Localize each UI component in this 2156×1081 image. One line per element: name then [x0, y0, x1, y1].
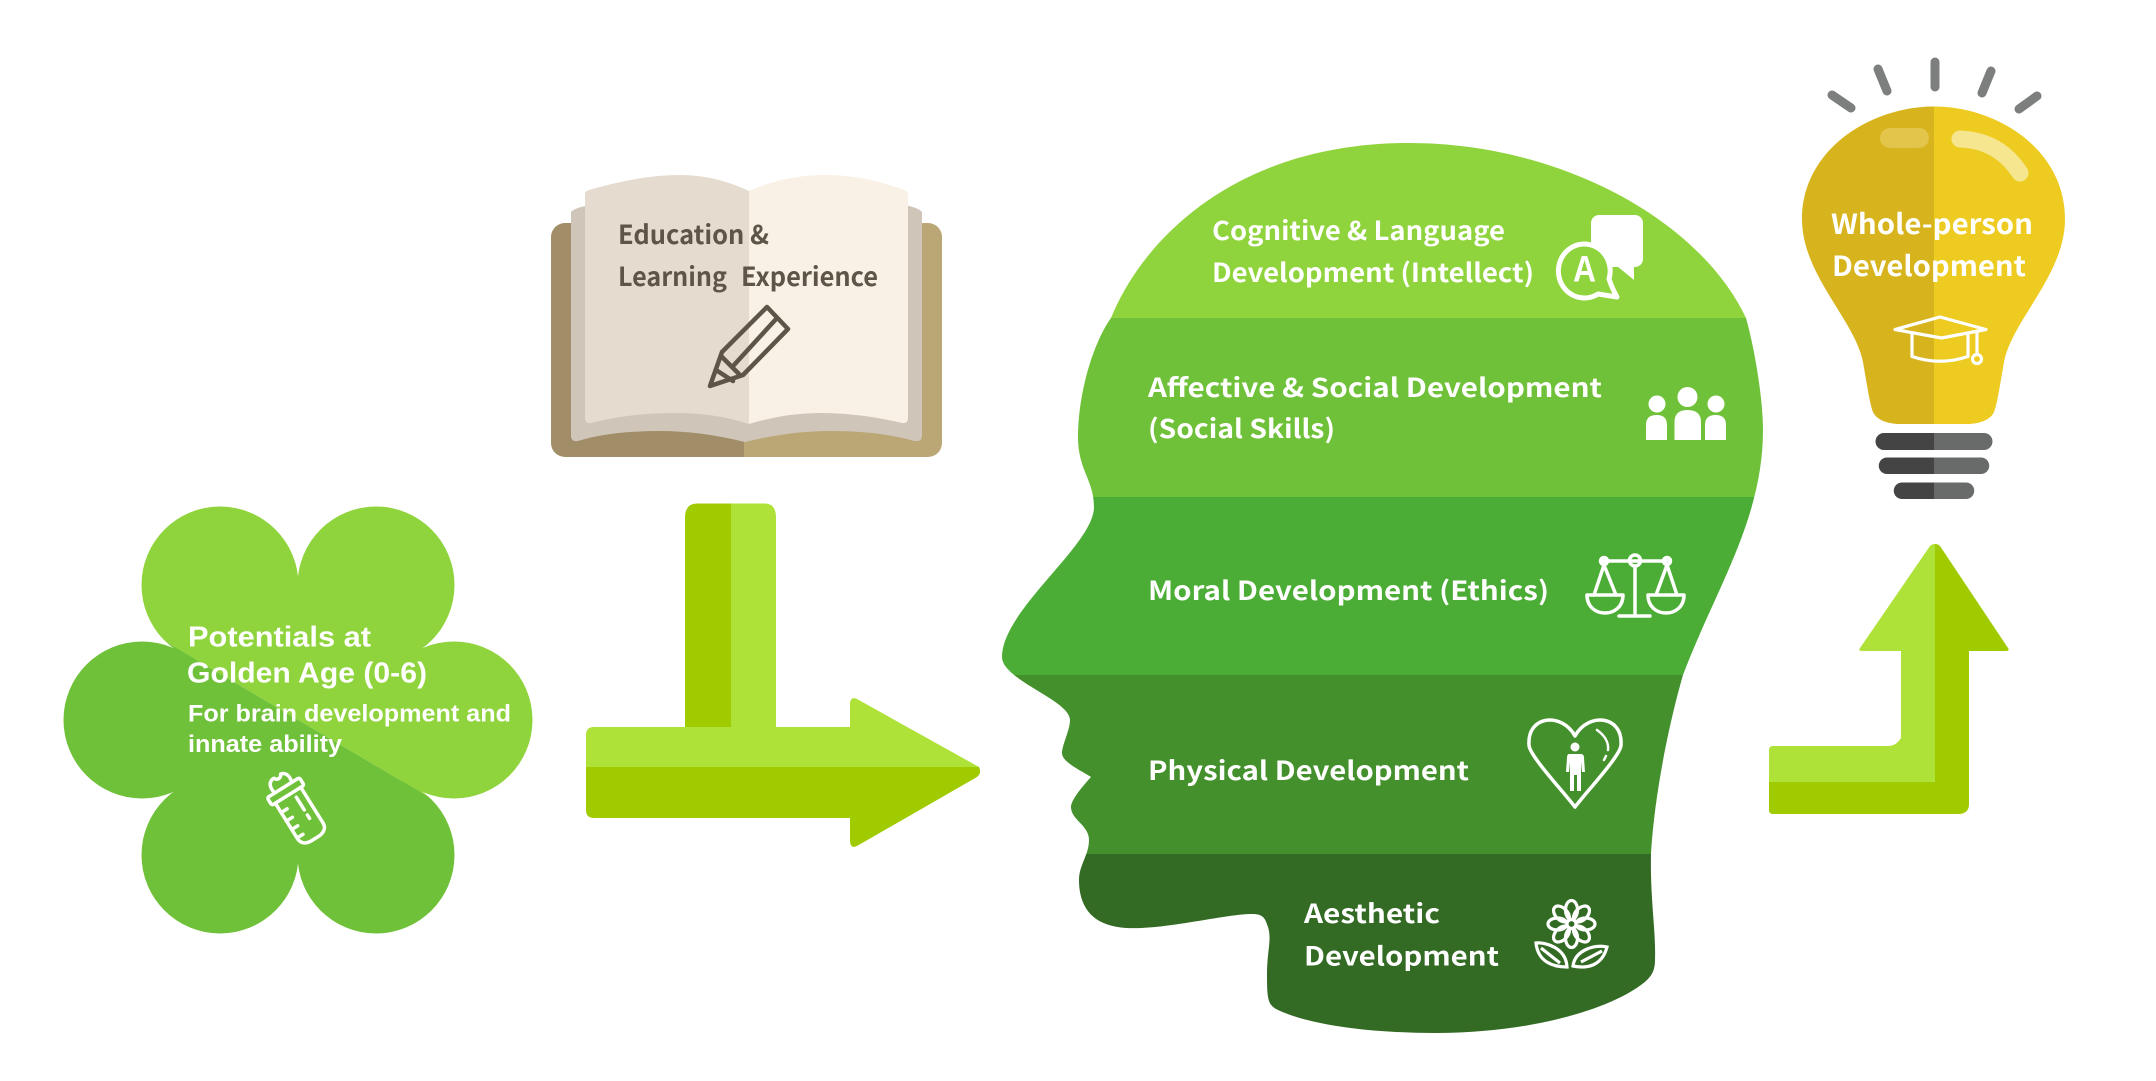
bulb glass left [1802, 106, 1934, 424]
label: affective and social: (Social Skills) [1148, 409, 1335, 446]
icon: speech bubbles [1558, 215, 1643, 298]
bulb glass right [1934, 106, 2065, 424]
clover description: For brain development and [188, 700, 511, 728]
book left page [585, 175, 749, 424]
clover heading: Golden Age (0-6) [187, 658, 427, 690]
head colour bands [990, 130, 1780, 1044]
panel: clover of potentials at golden age [64, 506, 532, 934]
clover light half [142, 506, 532, 798]
clover description: innate ability [188, 731, 343, 758]
bulb title [1831, 203, 2033, 285]
panel: open book [551, 175, 942, 457]
label: aesthetic: Aesthetic [1303, 894, 1440, 931]
label: cognitive and language: Development (Intellect) [1212, 253, 1534, 290]
label: moral: Moral Development (Ethics) [1148, 571, 1549, 608]
icon: flower [1536, 900, 1607, 967]
book right page [749, 175, 908, 424]
icon: graduation cap [1895, 317, 1986, 364]
clover dark half [64, 642, 454, 934]
bulb highlights [1880, 128, 2020, 173]
label: aesthetic [1303, 894, 1499, 974]
icon: baby bottle [260, 767, 331, 849]
bulb base [1876, 433, 1992, 499]
book title: Learning [618, 257, 727, 294]
book title [618, 215, 878, 294]
label: cognitive and language [1212, 211, 1534, 290]
book title: Experience [741, 257, 878, 294]
book cover [551, 223, 942, 457]
icon: scales [1587, 555, 1684, 616]
bulb title: Whole-person [1831, 203, 2033, 243]
icon: speech bubbles: A [1573, 248, 1596, 290]
label: cognitive and language: Cognitive & Language [1212, 211, 1505, 248]
book under pages [571, 205, 922, 442]
clover heading: Potentials at [188, 622, 371, 654]
arrow: from head up to bulb [1769, 544, 2009, 814]
bulb title: Development [1832, 245, 2026, 285]
book title: Education & [618, 215, 769, 252]
label: physical: Physical Development [1148, 751, 1469, 788]
panel: head with development layers [990, 130, 1780, 1044]
arrow: from book and clover into head [586, 504, 980, 847]
label: affective and social: Affective & Social Development [1147, 368, 1602, 405]
icon: people [1646, 387, 1726, 440]
icon: pencil [710, 307, 788, 386]
bulb rays [1832, 62, 2037, 109]
clover heading [187, 622, 427, 690]
icon: heart with person [1529, 720, 1621, 807]
panel: light bulb [1802, 62, 2065, 499]
label: affective and social [1147, 368, 1602, 446]
label: aesthetic: Development [1304, 936, 1499, 974]
clover description [188, 700, 511, 758]
